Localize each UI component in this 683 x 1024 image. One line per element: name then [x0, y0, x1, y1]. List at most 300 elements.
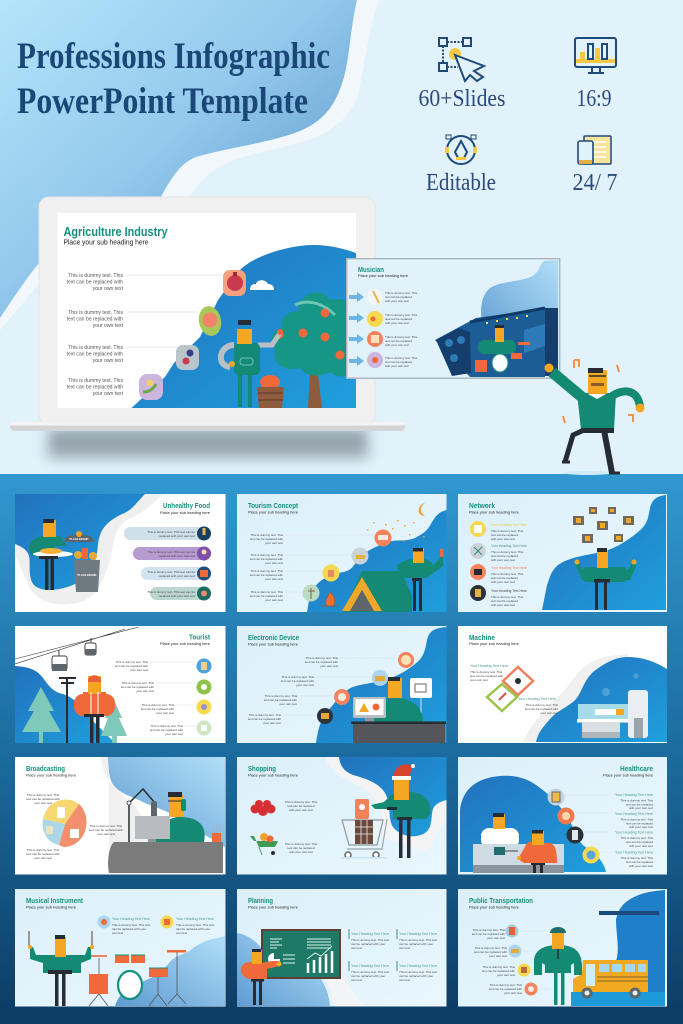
- subheading: Place your sub heading here: [248, 904, 298, 910]
- icon circles: [317, 652, 414, 724]
- text rows: This is dummy text. This: [68, 345, 123, 351]
- list items: This is dummy text. This: [491, 595, 524, 599]
- text rows: This is dummy text. This: [490, 983, 522, 987]
- tree: [271, 292, 356, 408]
- text grid: Your Heading Text Here: [399, 932, 437, 936]
- title: PowerPoint Template: [17, 81, 308, 122]
- blue blob: [339, 757, 447, 836]
- character: man in jacket: [74, 675, 115, 743]
- slide: shopping: [237, 757, 446, 874]
- character: drummer with sticks: [28, 931, 94, 1006]
- text grid: own text: [351, 946, 362, 950]
- trees: [22, 687, 127, 743]
- pills: replaced with your own text: [159, 594, 195, 598]
- right text list: text can be replaced: [626, 802, 653, 806]
- text rows: your own text: [136, 689, 154, 693]
- body text: text can be replaced: [385, 295, 412, 299]
- list item right: can be replaced with your: [176, 927, 210, 931]
- diamonds: [487, 667, 533, 711]
- blue wave: [316, 627, 447, 743]
- sign and bag: PLACE BRAND: [70, 537, 89, 541]
- basket: [257, 375, 284, 408]
- text rows: text can be replaced with: [305, 660, 338, 664]
- label: Editable: Editable: [426, 170, 496, 196]
- list items: text can be replaced: [491, 599, 518, 603]
- blue wave: [536, 657, 667, 742]
- body text: This is dummy text. This: [385, 356, 418, 360]
- text: right: This is dummy text. This: [90, 824, 123, 828]
- text grid: This is dummy text. This text: [399, 970, 437, 974]
- text block right: your own text: [540, 711, 558, 715]
- blue blob: [460, 776, 606, 872]
- list items: with your own text: [491, 580, 515, 584]
- character: radio host: [155, 792, 205, 842]
- list item left: [98, 916, 150, 935]
- gondolas: [52, 638, 96, 671]
- text: top: This is dummy text. This: [27, 793, 60, 797]
- text: top: [26, 793, 60, 805]
- subheading: Place your sub heading here: [248, 772, 298, 778]
- body text: with your own text: [385, 343, 409, 347]
- character: man at desk: [374, 677, 423, 722]
- icon circles: [548, 788, 600, 864]
- character: presenter: [241, 949, 282, 1005]
- icon circles: [506, 924, 538, 996]
- sign and bag: [64, 531, 100, 592]
- text rows: text can be replaced with: [150, 728, 183, 732]
- text: top: This is dummy text. This: [285, 800, 318, 804]
- speakers: [436, 328, 471, 376]
- right text list: with your own text: [629, 825, 653, 829]
- text rows: text can be replaced with: [250, 557, 283, 561]
- right text list: [564, 793, 653, 868]
- slide: network: [458, 494, 667, 612]
- list item right: Your Heading Text Here: [176, 917, 214, 921]
- text rows: your own text: [156, 711, 174, 715]
- text rows: This is dummy text. This: [265, 694, 297, 698]
- text rows: text can be replaced with: [67, 352, 123, 358]
- heading: Tourist: [189, 633, 211, 642]
- list items: This is dummy text. This: [491, 529, 524, 533]
- text rows: text can be replaced with: [67, 316, 123, 322]
- text rows: This is dummy text. This: [249, 713, 281, 717]
- mug: [212, 823, 221, 843]
- right text list: with your own text: [629, 844, 653, 848]
- stage: [435, 308, 545, 377]
- subheading: Place your sub heading here: [603, 772, 653, 778]
- shadow wave: [523, 654, 628, 743]
- text grid: This is dummy text. This text: [399, 938, 437, 942]
- list item right: [160, 916, 214, 935]
- list items: text can be replaced: [491, 554, 518, 558]
- blue hill: [132, 245, 356, 408]
- heading: Electronic Device: [248, 633, 299, 642]
- text grid: own text: [399, 946, 410, 950]
- stop canopy: [599, 911, 659, 915]
- body text: with your own text: [385, 321, 409, 325]
- header wave: blue gradient: [0, 0, 357, 318]
- pie chart: [43, 800, 87, 847]
- text rows: [250, 533, 374, 602]
- title: Professions Infographic: [17, 36, 330, 77]
- text rows: [67, 273, 222, 397]
- pills: [124, 526, 211, 600]
- subheading: Place your sub heading here: [160, 641, 210, 646]
- chalkboard: [261, 929, 341, 979]
- text rows: your own text: [489, 954, 507, 958]
- arrows: [349, 292, 364, 366]
- subheading: Place your sub heading here: [64, 238, 148, 246]
- heading: Machine: [469, 633, 495, 642]
- heading: Shopping: [248, 764, 276, 773]
- text rows: This is dummy text. This: [251, 553, 283, 557]
- shopping cart: [342, 799, 387, 858]
- list items: This is dummy text. This: [491, 550, 524, 554]
- text rows: This is dummy text. This: [306, 656, 338, 660]
- text grid: own text: [399, 978, 410, 982]
- reception desk: [473, 844, 564, 873]
- list item right: own text: [176, 931, 187, 935]
- text rows: This is dummy text. This: [282, 675, 314, 679]
- list items: with your own text: [491, 603, 515, 607]
- right text list: text can be replaced: [626, 840, 653, 844]
- heading: Musical Instrument: [26, 896, 84, 905]
- subheading: Place your sub heading here: [469, 904, 519, 910]
- text rows: This is dummy text. This: [251, 533, 283, 537]
- text rows: text can be replaced with: [121, 685, 154, 689]
- icon: phone and book: [578, 136, 611, 164]
- pills: This is dummy text. This text can be: [147, 570, 195, 574]
- text block left: text can be replaced with: [470, 674, 504, 678]
- icon: selection cursor: [439, 38, 484, 81]
- monitor: [353, 697, 386, 722]
- list item left: can be replaced with your: [112, 927, 146, 931]
- blue wave: [307, 510, 447, 612]
- sign and bag: PLACE BRAND: [78, 573, 97, 577]
- right text list: text can be replaced: [626, 822, 653, 826]
- text grid: [349, 929, 437, 982]
- right text list: Your Heading Text Here: [615, 830, 653, 834]
- blue wave: [15, 494, 145, 590]
- icon: tomatoes: [250, 800, 276, 816]
- heading: agriculture industry: Agriculture Industry: [64, 225, 168, 239]
- utility pole: [59, 677, 76, 743]
- text rows: your own text: [296, 683, 314, 687]
- text: bottom: with your own text: [289, 850, 313, 854]
- text block left: Your Heading Text Here: [470, 664, 508, 668]
- icon circles: [367, 289, 383, 368]
- pills: replaced with your own text: [159, 574, 195, 578]
- character: man thumbs up: [574, 548, 636, 610]
- body text: with your own text: [385, 364, 409, 368]
- body text: [385, 291, 418, 368]
- subheading: Place your sub heading here: [26, 772, 76, 778]
- text rows: This is dummy text. This: [142, 703, 174, 707]
- pills: This is dummy text. This text can be: [147, 530, 195, 534]
- list items: with your own text: [491, 537, 515, 541]
- slide: public transportation: [458, 889, 667, 1006]
- right text list: This is dummy text. This: [621, 798, 653, 802]
- text rows: [472, 928, 550, 995]
- slide: tourism concept: [237, 494, 446, 612]
- text rows: This is dummy text. This: [68, 273, 123, 279]
- text grid: Your Heading Text Here: [351, 932, 389, 936]
- text: right: your own text: [97, 832, 115, 836]
- text rows: your own text: [265, 541, 283, 545]
- right text list: This is dummy text. This: [621, 818, 653, 822]
- text rows: your own text: [487, 936, 505, 940]
- blue hill: [15, 666, 115, 743]
- campfire: [322, 592, 339, 606]
- blue wave: [542, 495, 666, 610]
- text grid: This is dummy text. This text: [351, 970, 389, 974]
- heading: Tourism Concept: [248, 501, 299, 510]
- label: 60+Slides: 60+Slides: [418, 86, 506, 112]
- text: right: text can be replaced with: [89, 828, 123, 832]
- white card: [410, 678, 432, 714]
- text grid: Your Heading Text Here: [351, 964, 389, 968]
- subheading: Place your sub heading here: [248, 642, 298, 646]
- character: bus driver: [534, 927, 582, 1005]
- text: bottom: This is dummy text. This: [285, 842, 318, 846]
- text grid: can be replaced with your: [399, 974, 433, 978]
- icon: wheelbarrow: [250, 833, 278, 855]
- list items: Your Heading Text Here: [491, 523, 527, 527]
- list items: [470, 521, 527, 607]
- page background: upper area: [0, 0, 683, 475]
- character: doctor: [481, 813, 519, 848]
- text rows: your own text: [93, 323, 124, 329]
- list item left: This is dummy text. This text: [112, 923, 150, 927]
- text grid: own text: [351, 978, 362, 982]
- heading: Broadcasting: [26, 764, 65, 773]
- text block right: Your Heading Text Here: [518, 697, 556, 701]
- icon: pen tool: [445, 135, 477, 164]
- text rows: text can be replaced with: [67, 384, 123, 390]
- list items: Your Heading Text Here: [491, 544, 527, 548]
- text rows: your own text: [497, 973, 515, 977]
- text grid: can be replaced with your: [351, 942, 385, 946]
- subheading: Place your sub heading here: [469, 510, 519, 514]
- text: bottom: [26, 848, 60, 860]
- text rows: your own text: [320, 664, 338, 668]
- text rows: text can be replaced with: [248, 717, 281, 721]
- pills: replaced with your own text: [159, 534, 195, 538]
- text rows: text can be replaced with: [482, 969, 515, 973]
- list items: Your Heading Text Here: [491, 566, 527, 570]
- drum kit: [89, 950, 186, 1006]
- list items: text can be replaced: [491, 576, 518, 580]
- slide: electronic device: [237, 626, 446, 743]
- microphone stand: [127, 789, 157, 842]
- text rows: This is dummy text. This: [475, 946, 507, 950]
- character: santa shopper: [371, 764, 430, 858]
- text block left: This is dummy text. This: [470, 670, 503, 674]
- text rows: text can be replaced with: [141, 707, 174, 711]
- subheading: Place your sub heading here: [248, 510, 298, 514]
- text rows: [115, 660, 196, 736]
- text rows: text can be replaced with: [250, 594, 283, 598]
- list item left: own text: [112, 931, 123, 935]
- icon circles: [302, 530, 392, 602]
- text rows: This is dummy text. This: [68, 378, 123, 384]
- desk: [351, 722, 446, 743]
- character: patient: [517, 830, 557, 873]
- cable lines: [15, 627, 139, 664]
- list items: with your own text: [491, 558, 515, 562]
- desk: [108, 842, 223, 873]
- text rows: your own text: [279, 702, 297, 706]
- character: drummer: [475, 325, 530, 372]
- subheading: Place your sub heading here: [26, 904, 76, 910]
- list item left: Your Heading Text Here: [112, 917, 150, 921]
- body text: text can be replaced: [385, 317, 412, 321]
- slide: musical instrument: [15, 889, 226, 1006]
- text rows: This is dummy text. This: [251, 569, 283, 573]
- subheading: Place your sub heading here: [358, 273, 408, 278]
- text rows: text can be replaced with: [474, 950, 507, 954]
- text: top: text can be replaced with: [26, 797, 60, 801]
- slide: agriculture industry: [58, 213, 356, 408]
- title: [17, 36, 330, 122]
- shadow wave: [15, 494, 163, 604]
- label: 24/ 7: 24/ 7: [572, 170, 618, 196]
- text: top: text can be replaced: [287, 804, 315, 808]
- text rows: text can be replaced with: [264, 698, 297, 702]
- text: bottom: text can be replaced with: [26, 852, 60, 856]
- pills: This is dummy text. This text can be: [147, 550, 195, 554]
- white wave: [325, 974, 367, 1006]
- blue wave: [108, 757, 225, 847]
- list item right: This is dummy text. This text: [176, 923, 214, 927]
- text rows: your own text: [165, 732, 183, 736]
- slide: machine: [458, 626, 667, 743]
- text block left: [470, 664, 508, 682]
- text grid: can be replaced with your: [399, 942, 433, 946]
- text rows: This is dummy text. This: [473, 928, 505, 932]
- slide: musician: [346, 258, 560, 379]
- text rows: This is dummy text. This: [68, 310, 123, 316]
- pills: replaced with your own text: [159, 554, 195, 558]
- right text list: with your own text: [629, 864, 653, 868]
- right text list: Your Heading Text Here: [615, 793, 653, 797]
- school bus: [573, 960, 648, 998]
- icon tiles: [139, 270, 246, 400]
- text: bottom: This is dummy text. This: [27, 848, 60, 852]
- slide: tourist: [15, 626, 226, 743]
- text: bottom: text can be replaced: [287, 846, 315, 850]
- text rows: text can be replaced with: [250, 537, 283, 541]
- heading: Public Transportation: [469, 896, 533, 905]
- label: 16:9: 16:9: [576, 86, 612, 112]
- text rows: text can be replaced with: [67, 280, 123, 286]
- text: top: your own text: [34, 801, 52, 805]
- character: dancing man: [544, 360, 644, 475]
- right text list: This is dummy text. This: [621, 856, 653, 860]
- subheading: Place your sub heading here: [160, 510, 210, 515]
- subheading: Place your sub heading here: [469, 641, 519, 646]
- icon circles: [196, 658, 212, 736]
- text rows: your own text: [93, 286, 124, 292]
- message tags: [573, 507, 634, 543]
- text grid: This is dummy text. This text: [351, 938, 389, 942]
- icon: cloud: [250, 280, 274, 290]
- slide: unhealthy food: [15, 494, 226, 612]
- text rows: your own text: [265, 561, 283, 565]
- stage tower: [545, 308, 558, 376]
- icon: moon: [419, 503, 425, 516]
- heading: Network: [469, 501, 495, 510]
- character: man with food tray: [29, 519, 73, 590]
- character: camper: [397, 548, 444, 611]
- body text: This is dummy text. This: [385, 291, 418, 295]
- text rows: your own text: [93, 358, 124, 364]
- lower band background: [0, 474, 683, 1024]
- text rows: your own text: [263, 721, 281, 725]
- slide: planning: [237, 889, 446, 1006]
- text rows: your own text: [93, 391, 124, 397]
- blue blob: [481, 260, 558, 348]
- right text list: Your Heading Text Here: [615, 812, 653, 816]
- text rows: text can be replaced with: [489, 987, 522, 991]
- slide: broadcasting: [15, 757, 226, 874]
- text rows: This is dummy text. This: [483, 965, 515, 969]
- text rows: your own text: [130, 668, 148, 672]
- text block right: text can be replaced with: [525, 707, 558, 711]
- character: farmer: [221, 320, 283, 407]
- medical scanner: [577, 674, 648, 738]
- list items: text can be replaced: [491, 533, 518, 537]
- text block left: your own text: [470, 678, 488, 682]
- heading: Unhealthy Food: [163, 501, 210, 510]
- text block right: [518, 697, 558, 715]
- monitor: [135, 816, 170, 842]
- tent: [342, 571, 412, 612]
- text rows: your own text: [265, 577, 283, 581]
- pills: This is dummy text. This text can be: [147, 590, 195, 594]
- blue wave: [115, 936, 225, 1006]
- text grid: can be replaced with your: [351, 974, 385, 978]
- header wave: white edge: [0, 0, 379, 330]
- text: top: [285, 800, 318, 812]
- white halo wave: [325, 757, 447, 852]
- list items: Your Heading Text Here: [491, 589, 527, 593]
- body text: text can be replaced: [385, 339, 412, 343]
- text: bottom: your own text: [34, 856, 52, 860]
- laptop shadow: [48, 428, 368, 458]
- text rows: text can be replaced with: [250, 573, 283, 577]
- text: right: [89, 824, 123, 836]
- right text list: with your own text: [629, 806, 653, 810]
- body text: This is dummy text. This: [385, 313, 418, 317]
- heading: musician: Musician: [358, 265, 384, 274]
- text rows: text can be replaced with: [115, 664, 148, 668]
- blue wave: [237, 933, 330, 1006]
- text: top: with your own text: [289, 808, 313, 812]
- text: bottom: [285, 842, 318, 854]
- stars: [367, 520, 424, 542]
- text rows: [248, 656, 397, 725]
- text grid: Your Heading Text Here: [399, 964, 437, 968]
- text rows: This is dummy text. This: [122, 681, 154, 685]
- right text list: text can be replaced: [626, 860, 653, 864]
- text rows: text can be replaced with: [281, 679, 314, 683]
- body text: with your own text: [385, 299, 409, 303]
- slide: healthcare: [458, 757, 667, 874]
- text rows: This is dummy text. This: [151, 724, 183, 728]
- laptop mockup: [10, 197, 405, 431]
- text rows: text can be replaced with: [472, 932, 505, 936]
